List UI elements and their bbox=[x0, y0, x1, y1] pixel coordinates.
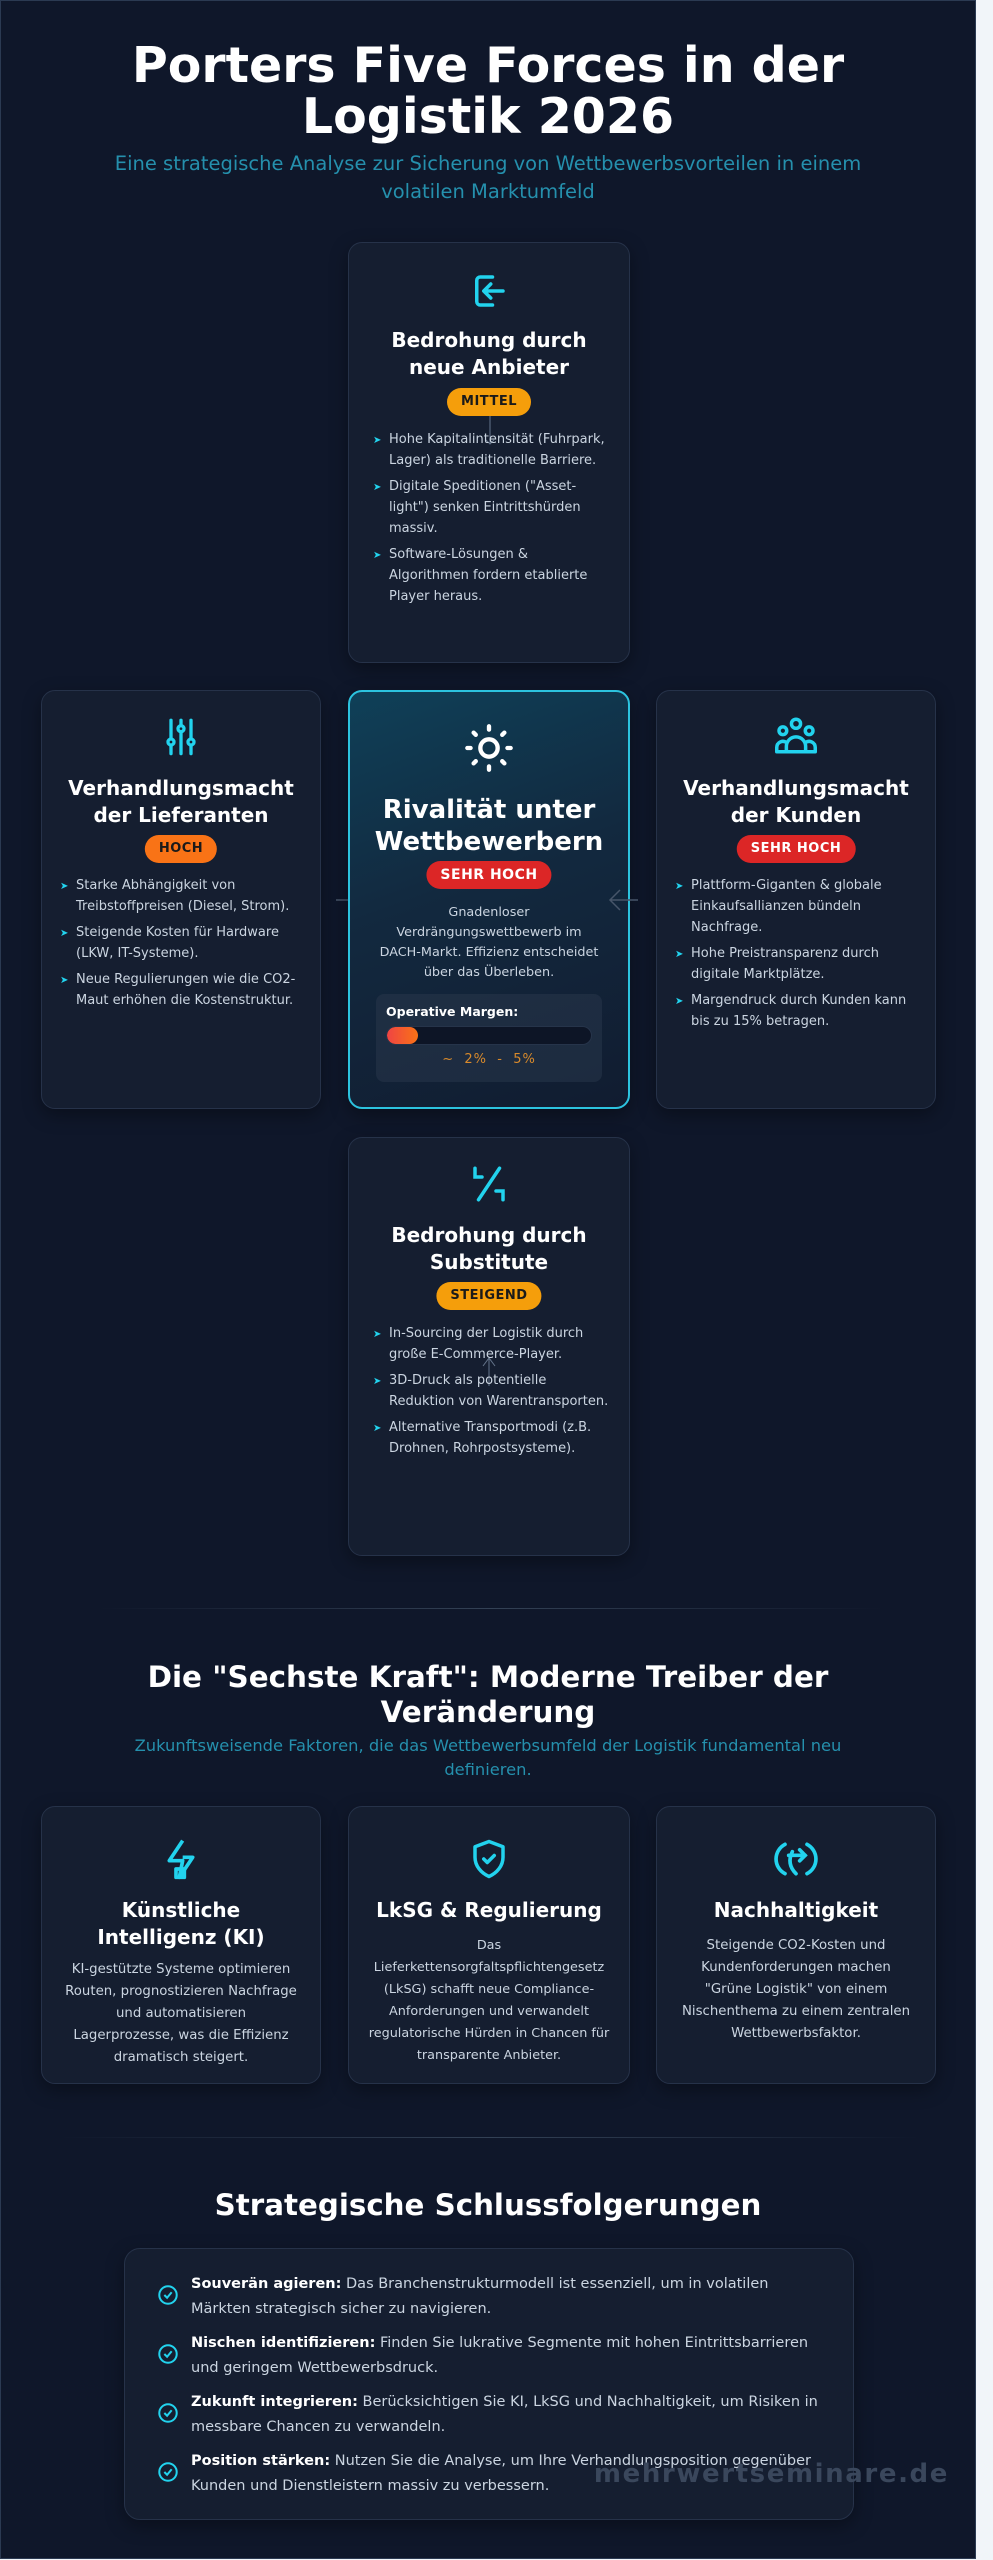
text: Kundenforderungen machen bbox=[701, 1960, 891, 1975]
heading: Bedrohung durch bbox=[391, 328, 587, 352]
heading: der Lieferanten bbox=[93, 803, 269, 827]
text bbox=[682, 1938, 910, 2041]
bullets: Hohe Preistransparenz durch digitale Marktplätze. bbox=[691, 946, 879, 982]
badge bbox=[436, 1282, 542, 1310]
badge bbox=[447, 388, 531, 416]
text: Nischenthema zu einem zentralen Wettbewerbsfaktor. bbox=[682, 2004, 910, 2041]
description: Verdrängungswettbewerb im bbox=[396, 925, 582, 940]
bullets: Hohe Kapitalintensität (Fuhrpark, Lager) als traditionelle Barriere. bbox=[389, 432, 605, 468]
chart: margins: ~ 2% - 5% bbox=[442, 1052, 536, 1067]
heading: Substitute bbox=[430, 1250, 548, 1274]
item 1: Souverän agieren: Das Branchenstrukturmodell ist essenziell, um in volatilen Märkten strategisch sicher zu navigieren. bbox=[191, 2276, 768, 2317]
badge: SEHR HOCH bbox=[440, 867, 538, 883]
bullets: Steigende Kosten für Hardware (LKW, IT-Systeme). bbox=[76, 925, 279, 961]
heading: Sechste Kraft: Die "Sechste Kraft": Moderne Treiber der Veränderung bbox=[148, 1660, 828, 1729]
badge: HOCH bbox=[159, 841, 203, 856]
arrow: up bbox=[482, 1358, 496, 1386]
badge: SEHR HOCH bbox=[751, 841, 841, 856]
panel: Substitute bbox=[348, 1137, 630, 1556]
icon: sun bbox=[465, 724, 513, 772]
badge bbox=[145, 835, 217, 863]
heading: Verhandlungsmacht bbox=[68, 776, 294, 800]
item 2: Nischen identifizieren: Finden Sie lukrative Segmente mit hohen Eintrittsbarrieren und geringem Wettbewerbsdruck. bbox=[191, 2335, 808, 2376]
panel: Nachhaltigkeit bbox=[656, 1806, 936, 2084]
heading: Nachhaltigkeit bbox=[714, 1898, 878, 1922]
text: "Grüne Logistik" von einem bbox=[705, 1982, 887, 1997]
text: Lieferkettensorgfaltspflichtengesetz (LkSG) schafft neue Compliance-Anforderungen und verwandelt regulatorische Hürden in Chancen für transparente Anbieter. bbox=[369, 1960, 609, 2063]
panel: KI bbox=[41, 1806, 321, 2084]
heading: Künstliche bbox=[122, 1898, 240, 1922]
heading bbox=[683, 776, 909, 827]
heading: Schlussfolgerungen: Strategische Schlussfolgerungen bbox=[215, 2188, 761, 2222]
description: DACH-Markt. Effizienz entscheidet bbox=[380, 945, 598, 960]
description: Gnadenloser bbox=[448, 905, 530, 920]
chart: margins bbox=[376, 994, 602, 1082]
icon: entry bbox=[475, 275, 505, 307]
item 3: Zukunft integrieren: Berücksichtigen Sie KI, LkSG und Nachhaltigkeit, um Risiken in messbare Chancen zu verwandeln. bbox=[191, 2394, 818, 2435]
icon: shield bbox=[473, 1840, 505, 1878]
heading: der Kunden bbox=[731, 803, 861, 827]
chart: margins: Operative Margen: bbox=[386, 1004, 518, 1019]
badge bbox=[737, 835, 855, 863]
bullets bbox=[61, 878, 295, 1008]
heading: Intelligenz (KI) bbox=[97, 1925, 265, 1949]
arrow: right into center bbox=[336, 899, 348, 901]
bullets bbox=[374, 432, 605, 604]
heading: Wettbewerbern bbox=[375, 827, 603, 857]
panel: Kunden bbox=[656, 690, 936, 1109]
bullets: Software-Lösungen & Algorithmen fordern etablierte Player heraus. bbox=[389, 547, 587, 604]
panel: Rivalität (center) bbox=[348, 690, 630, 1109]
heading: LkSG & Regulierung bbox=[376, 1898, 602, 1922]
icon: sliders bbox=[166, 718, 196, 756]
heading: neue Anbieter bbox=[409, 355, 569, 379]
item 4: Position stärken: Nutzen Sie die Analyse, um Ihre Verhandlungsposition gegenüber Kunden und Dienstleistern massiv zu verbessern. bbox=[191, 2453, 811, 2494]
heading bbox=[391, 328, 587, 379]
bullets: 3D-Druck als potentielle bbox=[389, 1373, 546, 1388]
arrow: left into center bbox=[609, 890, 638, 910]
panel: LkSG bbox=[348, 1806, 630, 2084]
badge: STEIGEND bbox=[450, 1288, 528, 1303]
subtitle: Eine strategische Analyse zur Sicherung von Wettbewerbsvorteilen in einem volatilen Marktumfeld bbox=[115, 152, 861, 203]
heading bbox=[97, 1898, 265, 1949]
bullets: Reduktion von Warentransporten. bbox=[389, 1394, 608, 1409]
text: Lagerprozesse, was die Effizienz dramatisch steigert. bbox=[73, 2028, 289, 2065]
bullets: Alternative Transportmodi (z.B. Drohnen, Rohrpostsysteme). bbox=[389, 1420, 591, 1456]
panel: Lieferanten bbox=[41, 690, 321, 1109]
panel: neue Anbieter bbox=[348, 242, 630, 663]
icon: leaf cycle bbox=[774, 1842, 818, 1876]
heading bbox=[375, 795, 603, 857]
panel: conclusions bbox=[124, 2248, 854, 2520]
heading: Verhandlungsmacht bbox=[683, 776, 909, 800]
heading: Bedrohung durch bbox=[391, 1223, 587, 1247]
bullets: In-Sourcing der Logistik durch bbox=[389, 1326, 583, 1341]
text: KI-gestützte Systeme optimieren Routen, prognostizieren Nachfrage und automatisieren bbox=[65, 1962, 297, 2021]
bullets: Margendruck durch Kunden kann bis zu 15% betragen. bbox=[691, 993, 906, 1029]
badge: MITTEL bbox=[461, 394, 517, 409]
bullets: Neue Regulierungen wie die CO2-Maut erhöhen die Kostenstruktur. bbox=[76, 972, 295, 1008]
watermark: mehrwertseminare.de bbox=[594, 2459, 949, 2489]
text: Das bbox=[477, 1938, 501, 1953]
bullets: Digitale Speditionen ("Asset-light") senken Eintrittshürden massiv. bbox=[389, 479, 581, 536]
bullets: Starke Abhängigkeit von Treibstoffpreisen (Diesel, Strom). bbox=[76, 878, 289, 914]
bullets: Plattform-Giganten & globale Einkaufsallianzen bündeln Nachfrage. bbox=[691, 878, 882, 935]
bullets bbox=[374, 1326, 608, 1456]
bullets: große E-Commerce-Player. bbox=[389, 1347, 562, 1362]
icon: bolt bbox=[167, 1840, 195, 1880]
icon: swap bbox=[473, 1166, 505, 1202]
badge bbox=[426, 861, 552, 889]
text bbox=[65, 1962, 297, 2065]
bullets bbox=[676, 878, 906, 1029]
description bbox=[380, 905, 598, 980]
text: Steigende CO2-Kosten und bbox=[707, 1938, 885, 1953]
icon: users bbox=[775, 718, 817, 754]
description: über das Überleben. bbox=[424, 965, 554, 980]
arrow: down bbox=[486, 416, 494, 445]
heading: Rivalität unter bbox=[383, 795, 595, 825]
heading bbox=[391, 1223, 587, 1274]
heading bbox=[68, 776, 294, 827]
title: Porters Five Forces in der Logistik 2026 bbox=[132, 37, 844, 145]
subtitle: Sechste Kraft: Zukunftsweisende Faktoren, die das Wettbewerbsumfeld der Logistik fundamental neu definieren. bbox=[135, 1736, 841, 1779]
